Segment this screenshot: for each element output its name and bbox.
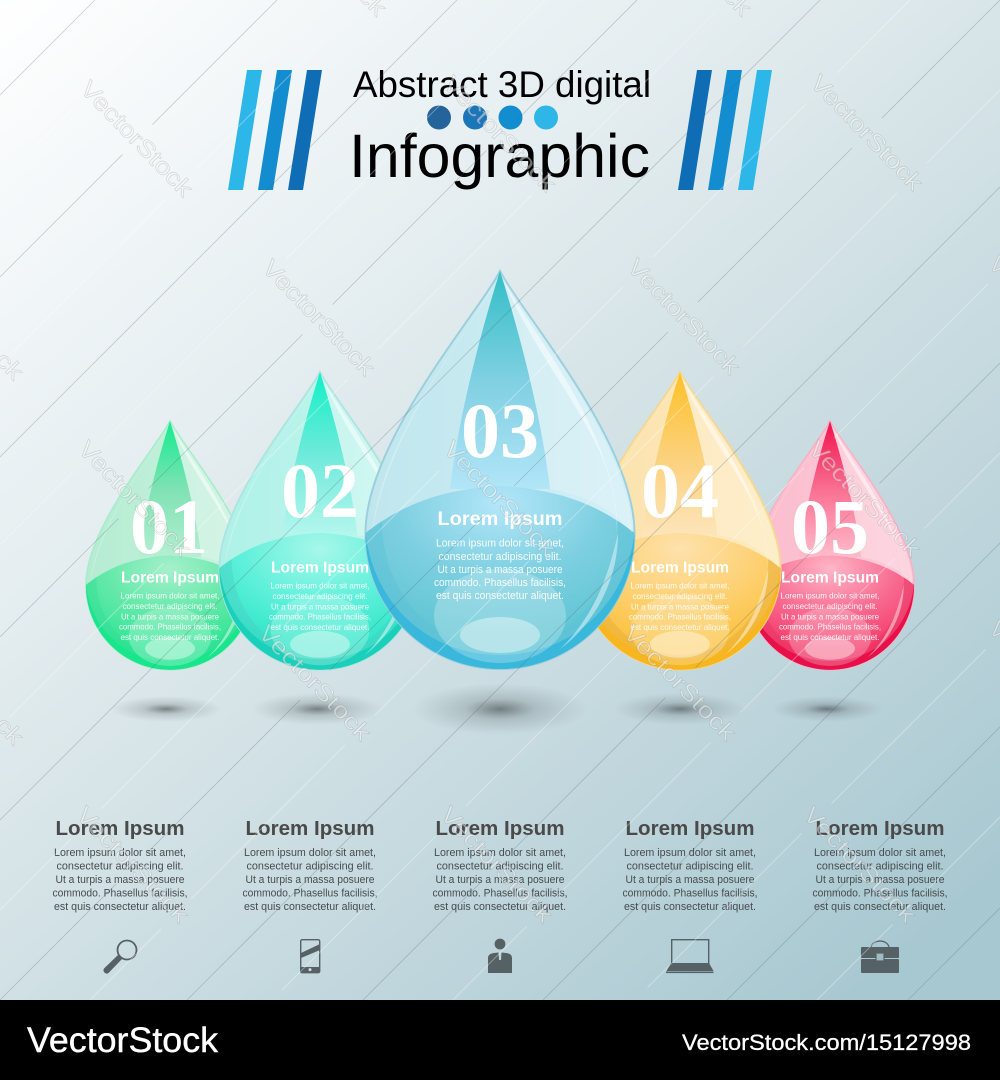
caption column 4: Lorem Ipsum bbox=[626, 818, 754, 840]
footer bar: VectorStock bbox=[27, 1021, 219, 1060]
drop 03 blue: commodo. Phasellus facilisis, bbox=[434, 577, 566, 589]
icon: laptop bbox=[666, 940, 714, 973]
drop 01 green: est quis consectetur aliquet. bbox=[120, 632, 220, 642]
watermarks: VectorStock bbox=[622, 253, 746, 380]
drop 01 green: Lorem ipsum dolor sit amet, bbox=[120, 590, 220, 600]
caption column 4: consectetur adipiscing elit. bbox=[626, 860, 754, 872]
drop 03 blue: 03 bbox=[461, 387, 539, 474]
drop 05 pink: consectetur adipiscing elit. bbox=[782, 601, 878, 611]
icon: smartphone bbox=[301, 940, 320, 973]
caption column 1: est quis consectetur aliquet. bbox=[54, 901, 186, 913]
drop 04 orange: Lorem Ipsum bbox=[631, 560, 729, 576]
drop 04 orange bbox=[579, 372, 781, 670]
caption column 1: consectetur adipiscing elit. bbox=[56, 860, 184, 872]
caption column 2: Ut a turpis a massa posuere bbox=[246, 874, 374, 886]
drop 05 pink: Ut a turpis a massa posuere bbox=[781, 612, 879, 622]
four dots bbox=[427, 106, 558, 130]
drop 02 teal: est quis consectetur aliquet. bbox=[270, 622, 370, 632]
drop 01 green: 01 bbox=[130, 483, 208, 570]
caption column 2: commodo. Phasellus facilisis, bbox=[242, 888, 378, 900]
drop 02 teal: Ut a turpis a massa posuere bbox=[271, 601, 369, 611]
caption column 4: est quis consectetur aliquet. bbox=[624, 901, 756, 913]
drop 05 pink: Lorem ipsum dolor sit amet, bbox=[780, 590, 880, 600]
title line 1: Abstract 3D digital bbox=[353, 64, 651, 105]
watermarks: VectorStock bbox=[257, 254, 381, 381]
drop 02 teal bbox=[219, 372, 421, 670]
caption column 2: Lorem Ipsum bbox=[246, 818, 374, 840]
caption column 2: est quis consectetur aliquet. bbox=[244, 901, 376, 913]
drop 04 orange: est quis consectetur aliquet. bbox=[630, 622, 730, 632]
caption column 5: Lorem ipsum dolor sit amet, bbox=[814, 847, 946, 859]
drop 05 pink bbox=[746, 421, 914, 670]
watermarks: VectorStock bbox=[805, 69, 929, 196]
caption column 1 bbox=[52, 818, 188, 913]
drop shadows bbox=[110, 683, 883, 735]
title block bbox=[228, 64, 772, 190]
watermarks: VectorStock bbox=[75, 75, 199, 202]
caption column 3: Ut a turpis a massa posuere bbox=[436, 874, 564, 886]
caption column 3 bbox=[432, 818, 568, 913]
caption column 5: Lorem Ipsum bbox=[816, 818, 944, 840]
caption column 4: commodo. Phasellus facilisis, bbox=[622, 888, 758, 900]
drop 03 blue: Lorem Ipsum bbox=[438, 508, 562, 530]
caption column 1: commodo. Phasellus facilisis, bbox=[52, 888, 188, 900]
caption column 2: Lorem ipsum dolor sit amet, bbox=[244, 847, 376, 859]
caption column 4: Lorem ipsum dolor sit amet, bbox=[624, 847, 756, 859]
drop 02 teal: Lorem ipsum dolor sit amet, bbox=[270, 580, 370, 590]
icon: businessman bbox=[488, 939, 512, 973]
watermarks: VectorStock bbox=[71, 801, 195, 928]
drop 03 blue: consectetur adipiscing elit. bbox=[438, 551, 562, 563]
drop 05 pink: est quis consectetur aliquet. bbox=[780, 632, 880, 642]
drop 04 orange: commodo. Phasellus facilisis, bbox=[629, 611, 731, 621]
caption column 5: est quis consectetur aliquet. bbox=[814, 901, 946, 913]
icon: briefcase bbox=[861, 941, 899, 973]
watermarks: VectorStock bbox=[73, 435, 197, 562]
caption column 3: consectetur adipiscing elit. bbox=[436, 860, 564, 872]
caption column 3: Lorem ipsum dolor sit amet, bbox=[434, 847, 566, 859]
footer bar bbox=[0, 1000, 1000, 1080]
left slanted bars bbox=[228, 70, 322, 190]
drop 01 green bbox=[86, 421, 254, 670]
icon: magnifier bbox=[103, 940, 136, 974]
caption column 3: Lorem Ipsum bbox=[436, 818, 564, 840]
caption column 1: Lorem Ipsum bbox=[56, 818, 184, 840]
caption column 5: Ut a turpis a massa posuere bbox=[816, 874, 944, 886]
caption column 2 bbox=[242, 818, 378, 913]
drop 05 pink: commodo. Phasellus facilisis, bbox=[779, 622, 881, 632]
caption column 5: consectetur adipiscing elit. bbox=[816, 860, 944, 872]
title line 2: Infographic bbox=[349, 122, 650, 190]
caption column 1: Ut a turpis a massa posuere bbox=[56, 874, 184, 886]
drop 05 pink: 05 bbox=[791, 483, 869, 570]
caption column 2: consectetur adipiscing elit. bbox=[246, 860, 374, 872]
watermarks: VectorStock bbox=[435, 801, 559, 928]
drop 01 green: consectetur adipiscing elit. bbox=[122, 601, 218, 611]
drop 03 blue: est quis consectetur aliquet. bbox=[436, 590, 564, 602]
drop 01 green: commodo. Phasellus facilisis, bbox=[119, 622, 221, 632]
watermarks: VectorStock bbox=[438, 70, 562, 197]
drop 04 orange: consectetur adipiscing elit. bbox=[632, 591, 728, 601]
watermarks: VectorStock bbox=[253, 619, 377, 746]
right slanted bars bbox=[678, 70, 772, 190]
watermarks: VectorStock bbox=[798, 801, 922, 928]
drop 02 teal: consectetur adipiscing elit. bbox=[272, 591, 368, 601]
drop 02 teal: commodo. Phasellus facilisis, bbox=[269, 611, 371, 621]
drop 05 pink: Lorem Ipsum bbox=[781, 570, 879, 586]
watermarks: VectorStock bbox=[618, 619, 742, 746]
drop 04 orange: 04 bbox=[641, 447, 719, 534]
drop 02 teal: Lorem Ipsum bbox=[271, 560, 369, 576]
drop 02 teal: 02 bbox=[281, 447, 359, 534]
caption column 4: Ut a turpis a massa posuere bbox=[626, 874, 754, 886]
caption column 4 bbox=[622, 818, 758, 913]
drop 04 orange: Ut a turpis a massa posuere bbox=[631, 601, 729, 611]
caption column 3: commodo. Phasellus facilisis, bbox=[432, 888, 568, 900]
caption column 1: Lorem ipsum dolor sit amet, bbox=[54, 847, 186, 859]
caption column 3: est quis consectetur aliquet. bbox=[434, 901, 566, 913]
watermarks: VectorStock bbox=[803, 435, 927, 562]
drop 03 blue bbox=[366, 271, 634, 669]
drop 01 green: Ut a turpis a massa posuere bbox=[121, 612, 219, 622]
caption column 5: commodo. Phasellus facilisis, bbox=[812, 888, 948, 900]
drop 04 orange: Lorem ipsum dolor sit amet, bbox=[630, 580, 730, 590]
drop 03 blue: Lorem ipsum dolor sit amet, bbox=[436, 538, 564, 550]
caption column 5 bbox=[812, 818, 948, 913]
footer bar: VectorStock.com/15127998 bbox=[682, 1030, 971, 1055]
drop 03 blue: Ut a turpis a massa posuere bbox=[438, 564, 563, 576]
watermarks: VectorStock bbox=[438, 435, 562, 562]
drop 01 green: Lorem Ipsum bbox=[121, 570, 219, 586]
